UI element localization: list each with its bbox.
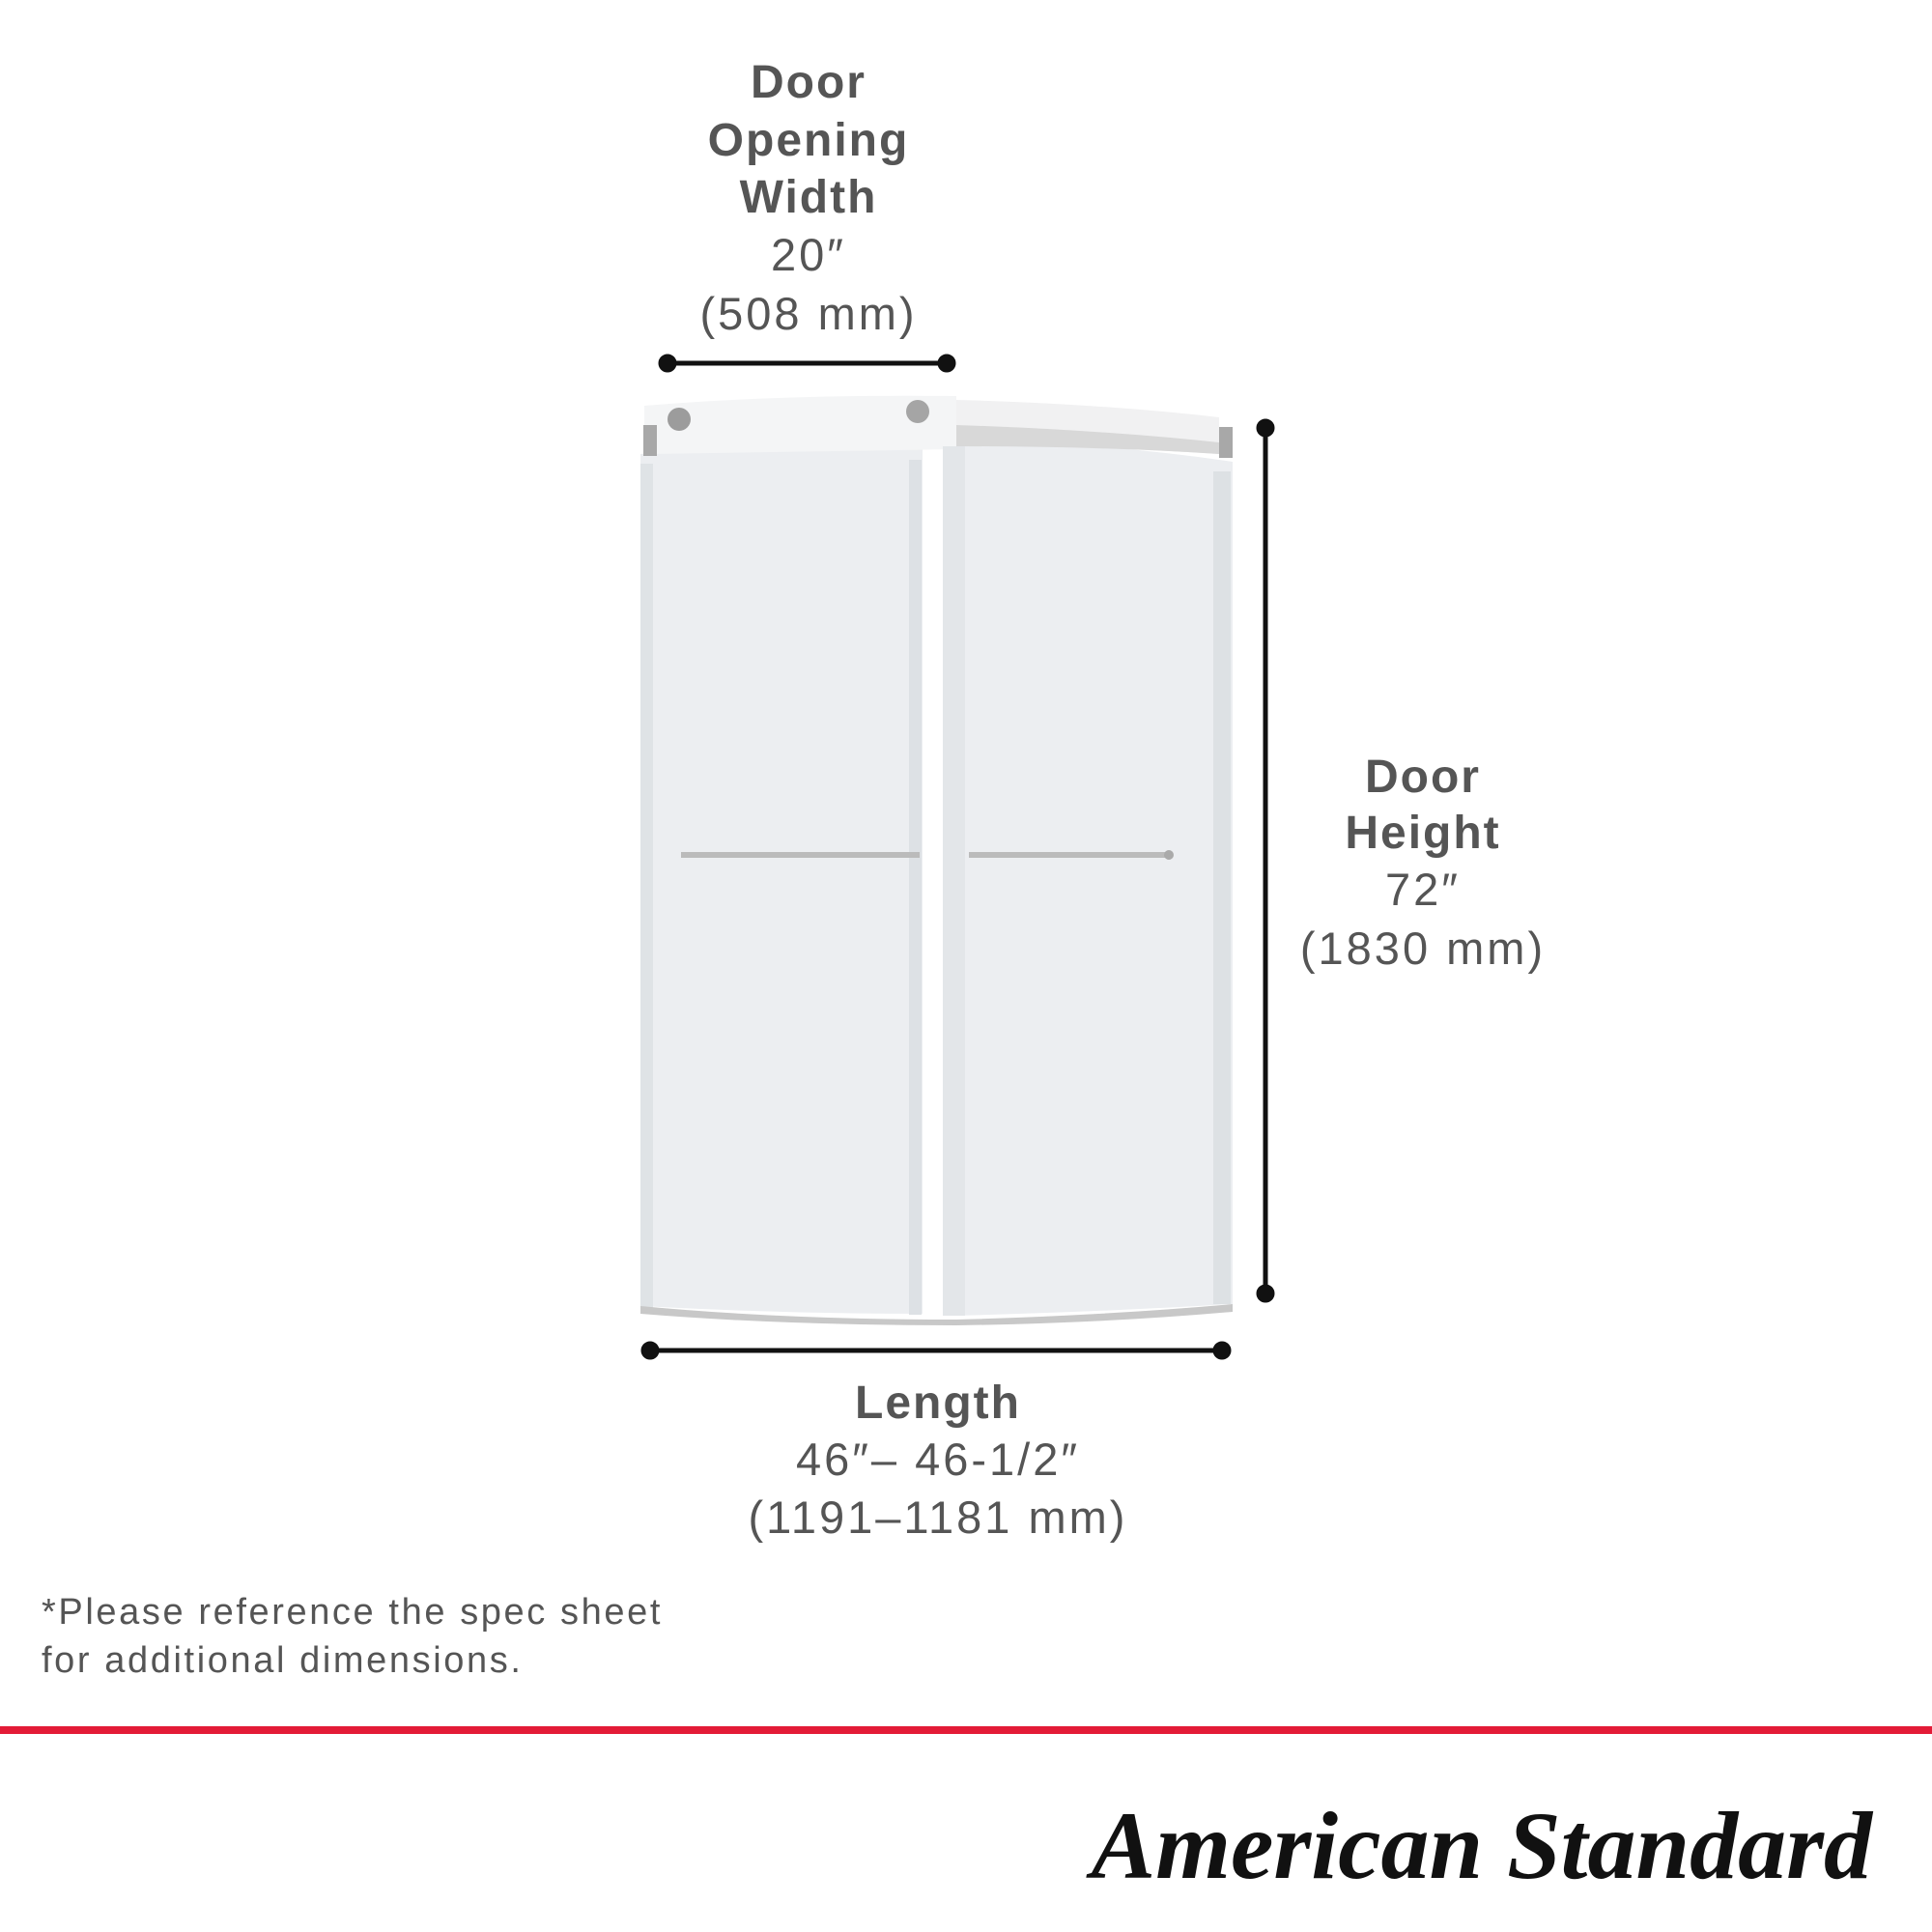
logo: American Standard [1086,1792,1874,1899]
heading: door height [1300,752,1546,974]
heading: door height: (1830 mm) [1300,923,1546,974]
heading: length: 46″– 46-1/2″ [796,1434,1080,1485]
heading: door opening width: Door [751,57,867,108]
heading: door opening width: (508 mm) [699,288,918,339]
footnote [42,1592,663,1681]
arrow: top dimension line [659,355,955,372]
heading: door opening width: 20″ [771,229,846,280]
heading: door height: Door [1365,752,1481,803]
arrow: height dimension line [1257,419,1274,1302]
shower door illustration [640,396,1233,1325]
heading: door height: Height [1345,808,1501,859]
heading: door height: 72″ [1385,864,1461,915]
footnote: for additional dimensions. [42,1640,524,1681]
heading: length: (1191–1181 mm) [749,1492,1127,1543]
heading: door opening width [699,57,918,339]
heading: door opening width: Width [740,172,877,223]
red divider [0,1726,1932,1734]
footnote: *Please reference the spec sheet [42,1592,663,1633]
heading: door opening width: Opening [708,115,909,166]
arrow: length dimension line [641,1342,1231,1359]
heading: length: Length [855,1378,1021,1429]
heading: length [749,1378,1127,1543]
